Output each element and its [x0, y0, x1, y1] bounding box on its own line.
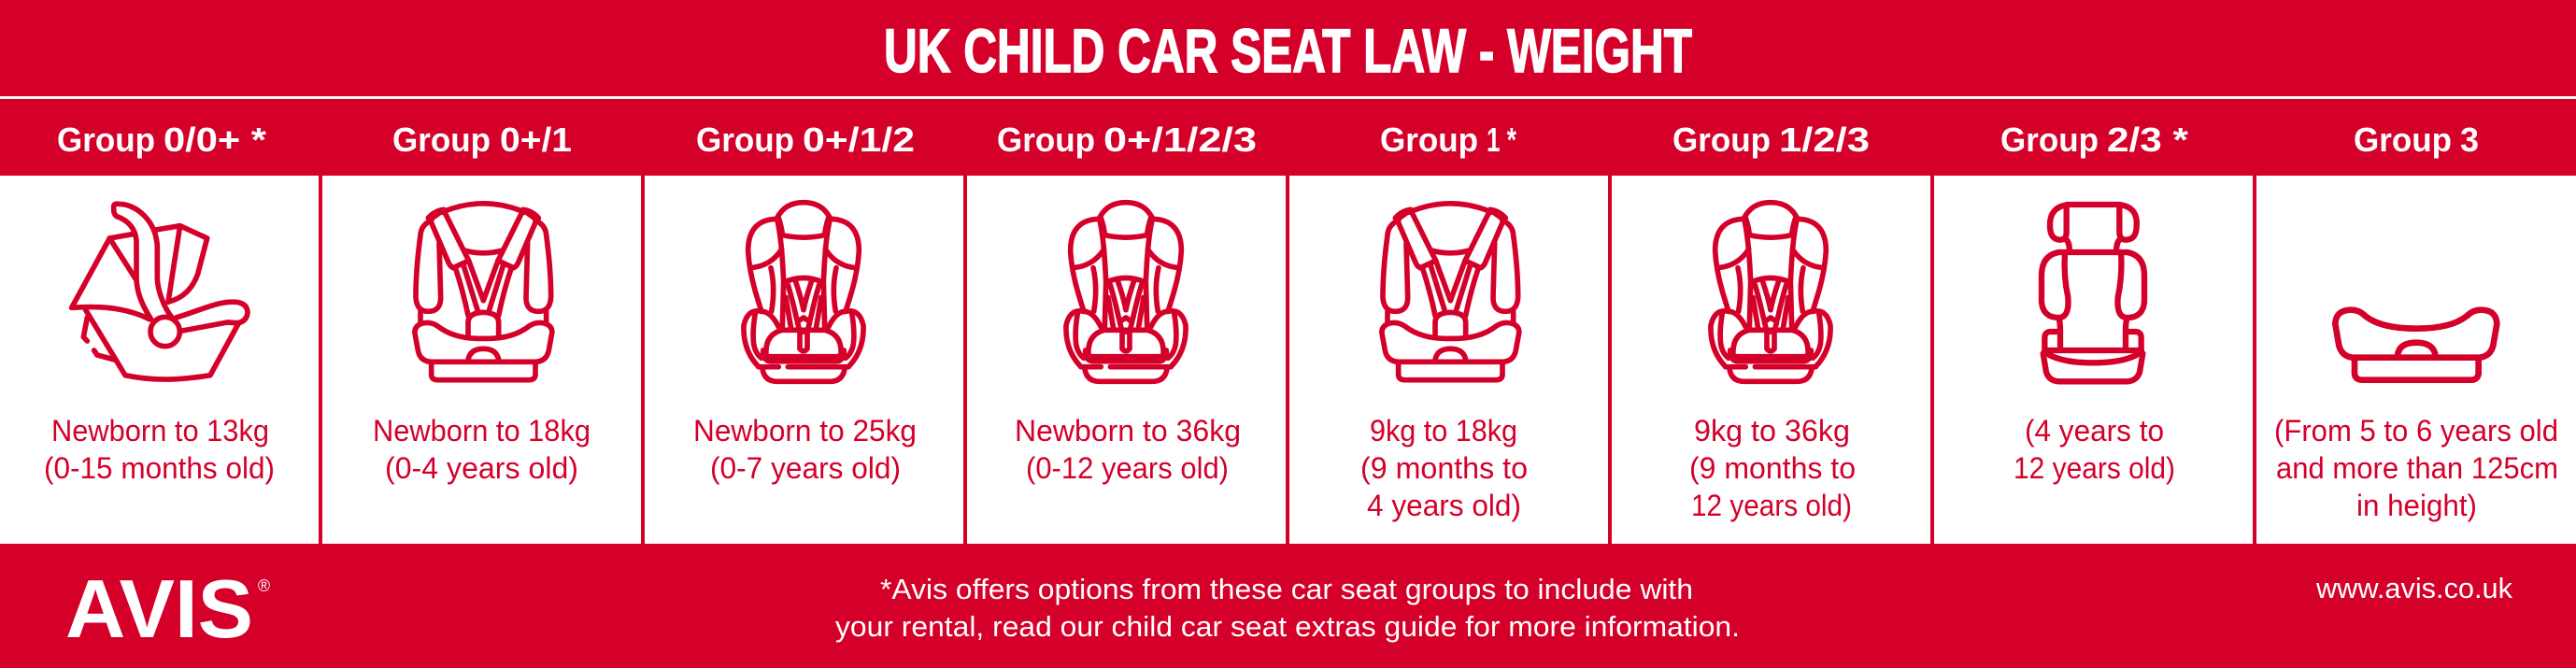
heading: Group 0+/1/2/3: Group: [997, 121, 1095, 159]
text: weight and age: [1689, 414, 1856, 522]
text: weight and age: 12 years old): [1691, 489, 1852, 522]
heading: Group 3: Group: [2354, 121, 2452, 159]
text: age and height: [2274, 414, 2558, 522]
panel: Group 0+/1/2/3: [997, 121, 1257, 485]
heading: Group 0+/1/2: Group: [696, 121, 794, 159]
panel: Group 0/0+: [44, 121, 275, 485]
heading: Group 1/2/3: [1672, 121, 1870, 159]
heading: Group 1/2/3: 1/2/3: [1779, 121, 1870, 159]
heading: Group 2/3: Group: [2000, 121, 2099, 159]
icon: high-back seat: [744, 203, 863, 381]
icon: harness seat: [1382, 204, 1519, 380]
icon: high-back seat: [1711, 203, 1830, 381]
panel: Group 0+/1: [373, 121, 591, 485]
text: weight and age: [693, 414, 917, 485]
text: weight and age: 9kg to 36kg: [1694, 414, 1850, 448]
heading: Group 0+/1: 0+/1: [500, 121, 572, 159]
heading: Group 0+/1: [392, 121, 572, 159]
header band: [0, 99, 2576, 176]
text: weight and age: 4 years old): [1367, 489, 1521, 522]
text: age and height: and more than 125cm: [2276, 451, 2558, 485]
footnote: [835, 573, 1740, 643]
heading: Group 0/0+: [57, 121, 266, 159]
text: weight and age: (9 months to: [1689, 451, 1856, 485]
heading: Group 3: 3: [2460, 121, 2479, 159]
text: weight and age: (0-4 years old): [385, 451, 578, 485]
logo: AVIS: ®: [258, 576, 270, 595]
text: age: 12 years old): [2014, 451, 2175, 485]
text: weight and age: Newborn to 18kg: [373, 414, 591, 448]
website: www.avis.co.uk: [2315, 572, 2512, 604]
text: weight and age: (0-7 years old): [710, 451, 901, 485]
panel: Group 1/2/3: [1672, 121, 1870, 522]
text: age: (4 years to: [2025, 414, 2164, 448]
panel: Group 0+/1/2: [693, 121, 917, 485]
text: weight and age: (9 months to: [1360, 451, 1528, 485]
text: weight and age: (0-12 years old): [1026, 451, 1229, 485]
heading: Group 1/2/3: Group: [1672, 121, 1771, 159]
icon: high-back booster: [2042, 205, 2144, 381]
heading: Group 2/3: 2/3 *: [2107, 121, 2188, 159]
text: weight and age: [1015, 414, 1241, 485]
text: weight and age: Newborn to 36kg: [1015, 414, 1241, 448]
title band: [0, 0, 2576, 96]
heading: Group 0+/1/2/3: 0+/1/2/3: [1103, 121, 1257, 159]
text: weight and age: [1360, 414, 1528, 522]
footnote: *Avis offers options from these car seat groups to include with: [880, 573, 1693, 605]
title: UK CHILD CAR SEAT LAW - WEIGHT: [884, 16, 1692, 85]
panel: Group 3: [2274, 121, 2558, 522]
heading: Group 0+/1/2/3: [997, 121, 1257, 159]
text: age and height: in height): [2356, 489, 2477, 522]
text: age and height: (From 5 to 6 years old: [2274, 414, 2558, 448]
footnote: your rental, read our child car seat extras guide for more information.: [835, 610, 1740, 643]
logo: AVIS: AVIS: [65, 562, 253, 655]
text: weight and age: (0-15 months old): [44, 451, 275, 485]
text: weight and age: 9kg to 18kg: [1370, 414, 1517, 448]
text: weight and age: [373, 414, 591, 485]
text: weight and age: Newborn to 25kg: [693, 414, 917, 448]
heading: Group 0/0+: 0/0+ *: [164, 121, 266, 159]
panel: Group 2/3: [2000, 121, 2188, 485]
heading: Group 2/3: [2000, 121, 2188, 159]
heading: Group 1: Group: [1380, 121, 1478, 159]
heading: Group 0+/1/2: [696, 121, 915, 159]
footer band: [0, 544, 2576, 668]
icon: harness seat: [415, 204, 552, 380]
heading: Group 0+/1: Group: [392, 121, 491, 159]
text: weight and age: [44, 414, 275, 485]
heading: Group 0/0+: Group: [57, 121, 155, 159]
panel: Group 1: [1360, 121, 1528, 522]
text: age: [2014, 414, 2175, 485]
icon: booster cushion: [2335, 310, 2497, 380]
heading: Group 1: 1 *: [1487, 121, 1516, 159]
text: weight and age: Newborn to 13kg: [51, 414, 269, 448]
icon: high-back seat: [1066, 203, 1186, 381]
icon: infant carrier seat: [72, 204, 248, 379]
heading: Group 0+/1/2: 0+/1/2: [803, 121, 915, 159]
